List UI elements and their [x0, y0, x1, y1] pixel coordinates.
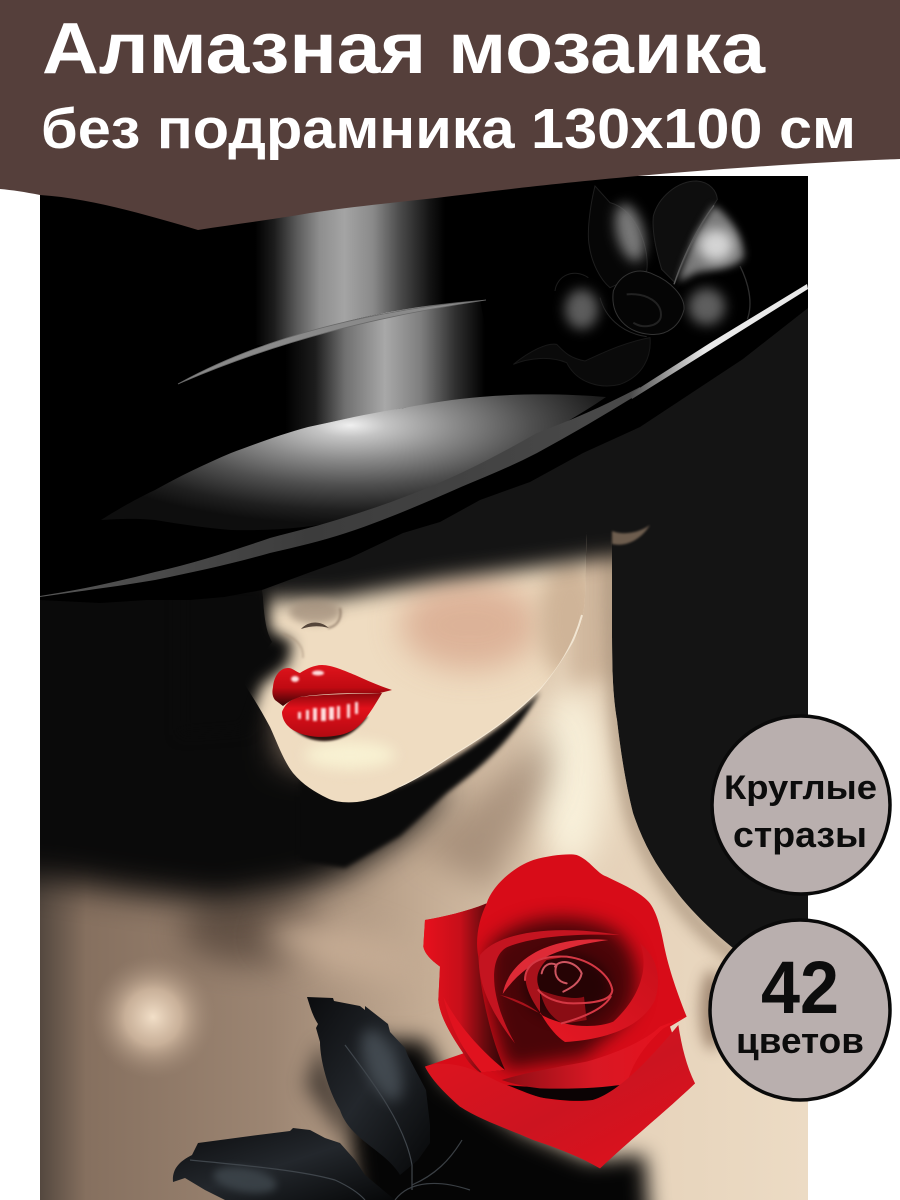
rose inner shadow	[487, 918, 638, 1070]
hat crown upper highlight	[255, 195, 445, 345]
neck highlight	[538, 690, 606, 870]
leaf: lower	[173, 1128, 395, 1200]
rose lower inner petal	[502, 1017, 686, 1089]
painting: lady in a black hat with a red rose	[0, 176, 808, 1200]
hat shadow cover over face edge	[538, 470, 588, 532]
badge: 42 colours	[710, 920, 890, 1100]
rose centre bud	[540, 990, 587, 1024]
hat black shadow band	[40, 176, 808, 603]
tone by the rose right	[700, 970, 724, 1050]
tan neck shade	[420, 730, 550, 890]
leaf: upper	[307, 997, 430, 1175]
black leaves	[173, 997, 470, 1200]
brim edge highlight	[630, 284, 808, 399]
shadow beside the nose	[240, 588, 303, 715]
neck upper tone	[564, 554, 613, 688]
badge: round rhinestones	[712, 716, 890, 894]
ear lobe	[612, 525, 650, 545]
brim underside band	[40, 387, 640, 597]
flower right dark petal	[653, 181, 717, 283]
badge: 42 colours: цветов	[736, 1020, 864, 1061]
cheek blush	[400, 580, 540, 670]
skin: neck and shoulders	[40, 541, 808, 1200]
lips	[272, 665, 392, 741]
jaw tone	[534, 561, 586, 676]
header banner	[0, 0, 900, 230]
hat shadow on the neck	[586, 480, 612, 577]
hat	[40, 176, 808, 603]
flower left tall petal	[588, 186, 647, 288]
dark area behind leaves	[345, 1040, 650, 1200]
face	[248, 506, 587, 802]
hat band line	[178, 300, 486, 384]
rose core shadow	[523, 953, 610, 1020]
rose inner curl petals	[479, 930, 620, 1043]
rose silhouette	[423, 854, 695, 1168]
flower centre	[613, 271, 684, 335]
flower left ball	[565, 289, 598, 329]
rose gap shadow	[507, 1084, 627, 1101]
rose cup petal	[542, 943, 658, 1042]
rose left petal	[423, 903, 505, 1072]
flower lower right ball	[740, 266, 750, 319]
neck edge tone	[612, 520, 740, 960]
hat shadow on the face	[262, 506, 586, 617]
title line 1: Алмазная мозаика	[42, 9, 766, 89]
chin highlight	[305, 741, 395, 769]
dark tone on the shoulder top	[180, 896, 320, 964]
rose centre spiral	[525, 956, 612, 1023]
rose bottom petal	[425, 1025, 695, 1168]
badge: round rhinestones: Круглые	[724, 769, 877, 807]
red rose	[423, 854, 695, 1168]
nose	[283, 608, 340, 658]
leaf stem	[395, 1140, 470, 1200]
flower bright petal	[678, 205, 744, 282]
title line 2: без подрамника 130х100 см	[41, 97, 856, 161]
nose shading	[289, 600, 341, 624]
badge: round rhinestones: стразы	[733, 814, 867, 855]
hat crown lower highlight	[294, 300, 480, 430]
flower ribbon	[513, 338, 650, 386]
lit brim top	[101, 394, 606, 530]
jaw rim light	[400, 615, 582, 787]
badge: 42 colours: 42	[761, 946, 839, 1029]
hat flower	[513, 181, 750, 386]
shadow falling across the neck and chest	[0, 540, 650, 1200]
